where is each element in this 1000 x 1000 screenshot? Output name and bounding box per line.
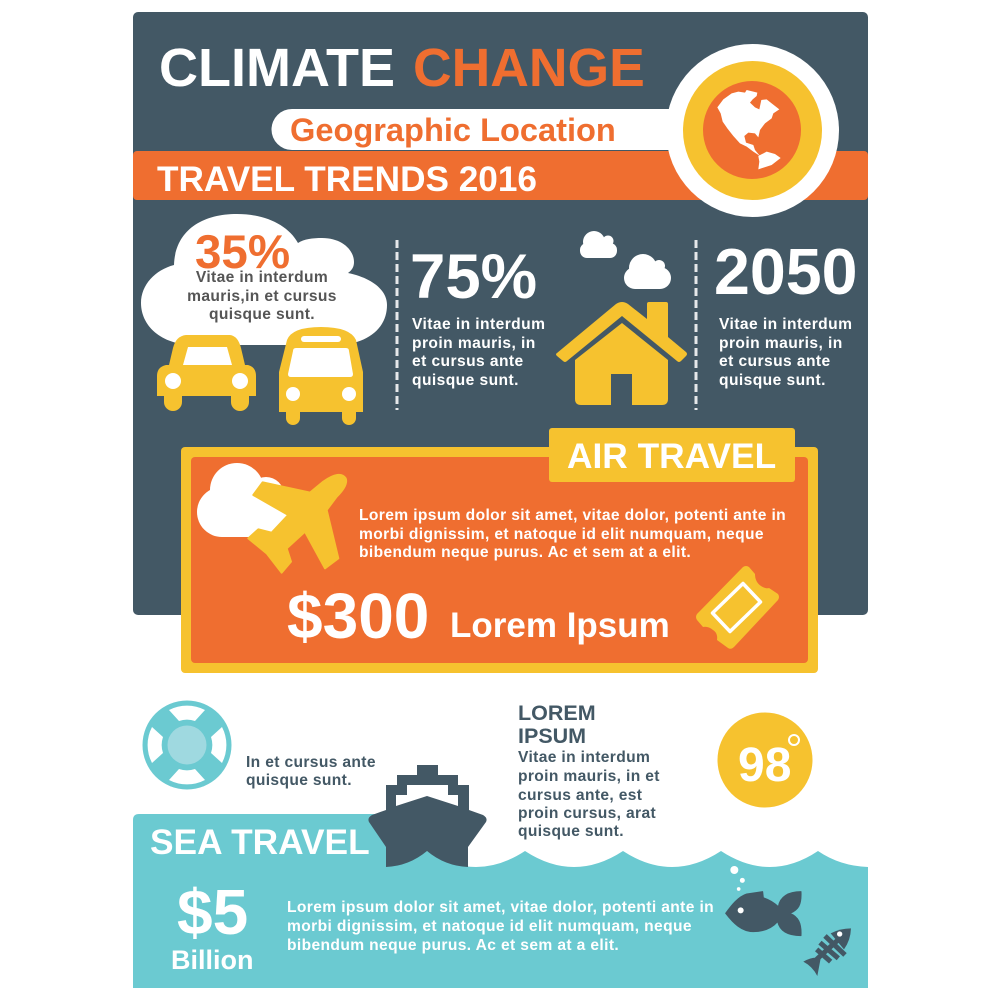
air travel text: morbi dignissim, et natoque id elit numquam, neque (359, 526, 764, 543)
stat: 2050: et cursus ante (719, 353, 831, 370)
text block: lorem ipsum: cursus ante, est (518, 787, 642, 804)
life ring text: In et cursus ante (246, 754, 376, 771)
panel: sea travel (133, 814, 868, 988)
subtitle pill (272, 109, 720, 150)
stat: 2050: quisque sunt. (719, 372, 826, 389)
air travel text (359, 507, 786, 561)
icon: house (556, 302, 687, 405)
text block: lorem ipsum: proin cursus, arat (518, 805, 656, 822)
icon: cloud (141, 214, 387, 345)
stat: $5 billion: Billion (171, 945, 254, 975)
stat: 2050: Vitae in interdum (719, 316, 852, 333)
title: CHANGE (413, 39, 645, 98)
icon: bus (279, 327, 363, 425)
icon: car (157, 335, 256, 411)
icon: fish (726, 866, 801, 936)
stat: 75%: quisque sunt. (412, 372, 519, 389)
panel: dark background (133, 12, 868, 615)
stat: 75%: 75% (410, 242, 537, 312)
banner: travel trends: TRAVEL TRENDS 2016 (157, 160, 537, 199)
text block: lorem ipsum (518, 701, 660, 840)
icon: globe badge (666, 44, 839, 217)
icon: fish bone (803, 928, 851, 976)
stat: 75% (410, 242, 545, 389)
text block: lorem ipsum: IPSUM (518, 724, 586, 748)
stat text: quisque sunt. (209, 306, 315, 323)
icon: plane (248, 475, 346, 573)
sea travel text: morbi dignissim, et natoque id elit numquam, neque (287, 918, 692, 935)
text block: lorem ipsum: LOREM (518, 701, 596, 725)
stat: $5 billion: $5 (177, 876, 248, 948)
stat text: Vitae in interdum (196, 269, 328, 286)
icon: life ring (142, 700, 232, 790)
icon: cloud behind plane (197, 463, 288, 537)
stat: 75%: et cursus ante (412, 353, 524, 370)
subtitle pill: Geographic Location (290, 111, 616, 148)
air travel text: bibendum neque purus. Ac et sem at a elit. (359, 544, 691, 561)
title: CLIMATE (159, 38, 395, 98)
panel: air travel (181, 428, 818, 673)
temperature badge (718, 712, 812, 808)
icon: small cloud (580, 231, 617, 258)
text block: lorem ipsum: proin mauris, in et (518, 768, 660, 785)
price label: Lorem Ipsum (450, 606, 670, 645)
title (159, 38, 645, 98)
stat text: mauris,in et cursus (187, 288, 337, 305)
stat: 75%: Vitae in interdum (412, 316, 545, 333)
icon: ship (368, 765, 487, 867)
heading: sea travel: SEA TRAVEL (150, 823, 370, 862)
icon: ticket (696, 566, 779, 649)
stat: 2050: proin mauris, in (719, 335, 843, 352)
price: $300 (287, 580, 429, 652)
banner: travel trends (133, 151, 868, 200)
text block: lorem ipsum: quisque sunt. (518, 823, 624, 840)
text block: lorem ipsum: Vitae in interdum (518, 749, 650, 766)
stat: 2050: 2050 (714, 236, 858, 308)
heading tab: air travel: AIR TRAVEL (567, 437, 776, 476)
temperature badge: 98 (738, 739, 791, 792)
heading tab: air travel (549, 428, 795, 482)
life ring text: quisque sunt. (246, 772, 352, 789)
life ring text (246, 754, 376, 789)
stat: 2050 (714, 236, 858, 389)
stat text (187, 269, 337, 323)
stat: 75%: proin mauris, in (412, 335, 536, 352)
stat: 35% cloud (141, 214, 387, 345)
sea travel text: Lorem ipsum dolor sit amet, vitae dolor, potenti ante in (287, 899, 714, 916)
stat value: 35% (195, 226, 290, 279)
sea travel text (287, 899, 714, 954)
air travel text: Lorem ipsum dolor sit amet, vitae dolor, potenti ante in (359, 507, 786, 524)
stat: $5 billion (171, 876, 254, 975)
sea travel text: bibendum neque purus. Ac et sem at a elit. (287, 937, 619, 954)
icon: large cloud (624, 254, 671, 289)
